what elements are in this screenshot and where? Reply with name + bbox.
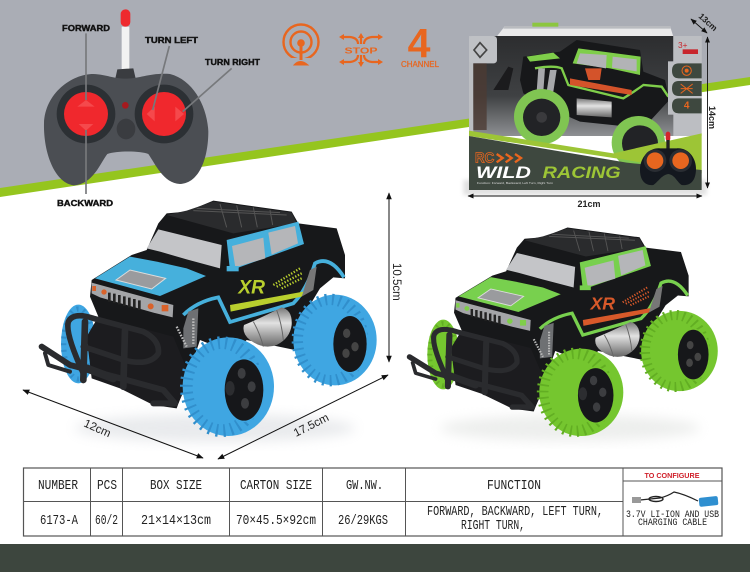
green truck shadow bbox=[440, 415, 700, 441]
label: backward: BACKWARD bbox=[57, 198, 113, 208]
dimension: truck width 12cm bbox=[23, 390, 203, 458]
table data row: 6173-A bbox=[40, 514, 79, 529]
configure cell: TO CONFIGURE bbox=[644, 471, 700, 480]
table data row: RIGHT TURN, bbox=[461, 519, 525, 534]
dimension: truck width 12cm: 12cm bbox=[82, 418, 112, 440]
product box: RACING bbox=[543, 163, 621, 182]
product box: Function: Forward, Backward, Left Turn, Right Turn bbox=[477, 181, 553, 185]
table data row: FORWARD, BACKWARD, LEFT TURN, bbox=[427, 505, 603, 520]
specification table bbox=[24, 468, 722, 536]
remote control bbox=[44, 9, 232, 194]
dimension: box width 21cm: 21cm bbox=[577, 199, 601, 209]
blue truck shadow bbox=[75, 414, 355, 442]
product box: 3+ bbox=[678, 40, 688, 50]
product box: WILD bbox=[476, 163, 531, 182]
dimension: truck length 17.5cm bbox=[218, 375, 388, 459]
table header row: FUNCTION bbox=[487, 479, 541, 494]
product box: 4 bbox=[684, 101, 690, 112]
table header row: BOX SIZE bbox=[150, 479, 202, 494]
table header row: GW.NW. bbox=[346, 479, 383, 494]
green truck bbox=[410, 228, 718, 436]
dimension: truck height 10.5cm: 10.5cm bbox=[390, 263, 402, 301]
dimension: box depth 13cm: 13cm bbox=[697, 11, 720, 33]
label: turn right: TURN RIGHT bbox=[205, 57, 261, 67]
table header row: NUMBER bbox=[38, 479, 78, 494]
table data row: 26/29KGS bbox=[338, 514, 388, 529]
table header row: CARTON SIZE bbox=[240, 479, 312, 494]
label: forward: FORWARD bbox=[62, 23, 110, 33]
icon: usb charging cable bbox=[632, 492, 718, 507]
icon: stop with direction arrows bbox=[339, 33, 383, 67]
background: grey upper area bbox=[0, 0, 750, 189]
configure cell: 3.7V LI-ION AND USB bbox=[626, 510, 719, 521]
blue truck bbox=[42, 201, 377, 436]
table data row: 70×45.5×92cm bbox=[236, 514, 316, 529]
configure cell: CHARGING CABLE bbox=[638, 518, 707, 529]
green diagonal band bbox=[0, 77, 750, 197]
boxed truck bbox=[514, 40, 669, 169]
green truck: XR bbox=[589, 294, 615, 314]
table header row: PCS bbox=[97, 479, 117, 494]
configure cell bbox=[626, 471, 719, 529]
icon: 4 channel: 4 bbox=[408, 20, 431, 66]
table data row: 60/2 bbox=[95, 514, 118, 529]
icon: radio signal bbox=[284, 24, 318, 67]
table data row: 21×14×13cm bbox=[141, 514, 211, 529]
icon: stop with direction arrows: STOP bbox=[344, 46, 378, 56]
blue truck: XR bbox=[237, 277, 265, 298]
table header row bbox=[38, 479, 541, 494]
dimension: truck length 17.5cm: 17.5cm bbox=[292, 412, 331, 440]
icon: 4 channel bbox=[401, 20, 439, 69]
product box bbox=[463, 23, 707, 195]
bottom dark band bbox=[0, 544, 750, 572]
table data row bbox=[40, 505, 603, 534]
label: turn left: TURN LEFT bbox=[145, 35, 199, 45]
product box: RC bbox=[475, 151, 495, 167]
icon: 4 channel: CHANNEL bbox=[401, 59, 439, 69]
dimension: box height 14cm: 14cm bbox=[707, 106, 717, 129]
